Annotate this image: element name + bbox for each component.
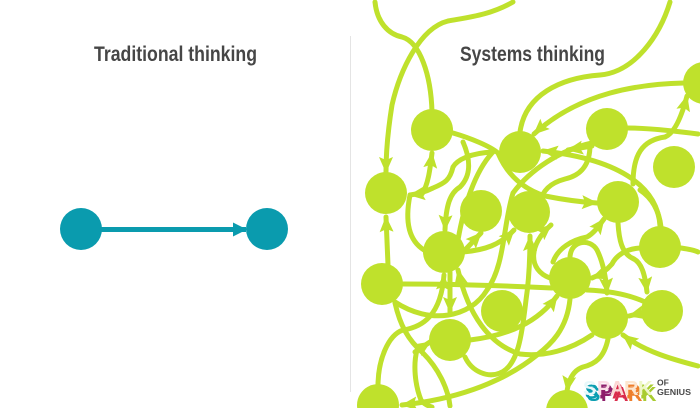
logo letters: R [624,378,639,400]
network nodes [357,62,700,408]
heading: Systems thinking: Systems thinking [460,43,605,66]
panel: traditional linear diagram [60,208,288,250]
logo tagline [657,378,691,397]
logo shadow letters: R [628,384,643,406]
arrow: cause to effect [95,227,246,232]
logo letters: S [583,378,596,400]
logo: Spark of Genius [583,378,691,406]
logo shadow letters [585,382,657,406]
node: start [60,208,102,250]
logo tagline: OF [657,378,669,388]
panel: systems network diagram [357,2,700,408]
heading: Traditional thinking: Traditional thinking [94,43,257,66]
logo shadow letters: K [642,384,657,406]
logo shadow letters: P [599,382,612,404]
logo shadow letters: A [614,384,628,406]
logo letters: A [610,378,624,400]
logo shadow letters: S [585,382,598,404]
logo shadow letters: R [626,382,641,404]
logo tagline: GENIUS [657,387,691,397]
logo letters: K [638,378,653,400]
network links [375,2,698,407]
logo shadow letters: K [640,382,655,404]
logo shadow letters: P [601,384,614,406]
logo shadow letters: A [612,382,626,404]
logo letters [583,378,653,400]
node: end [246,208,288,250]
logo letters: P [597,378,610,400]
logo shadow letters: S [587,384,600,406]
